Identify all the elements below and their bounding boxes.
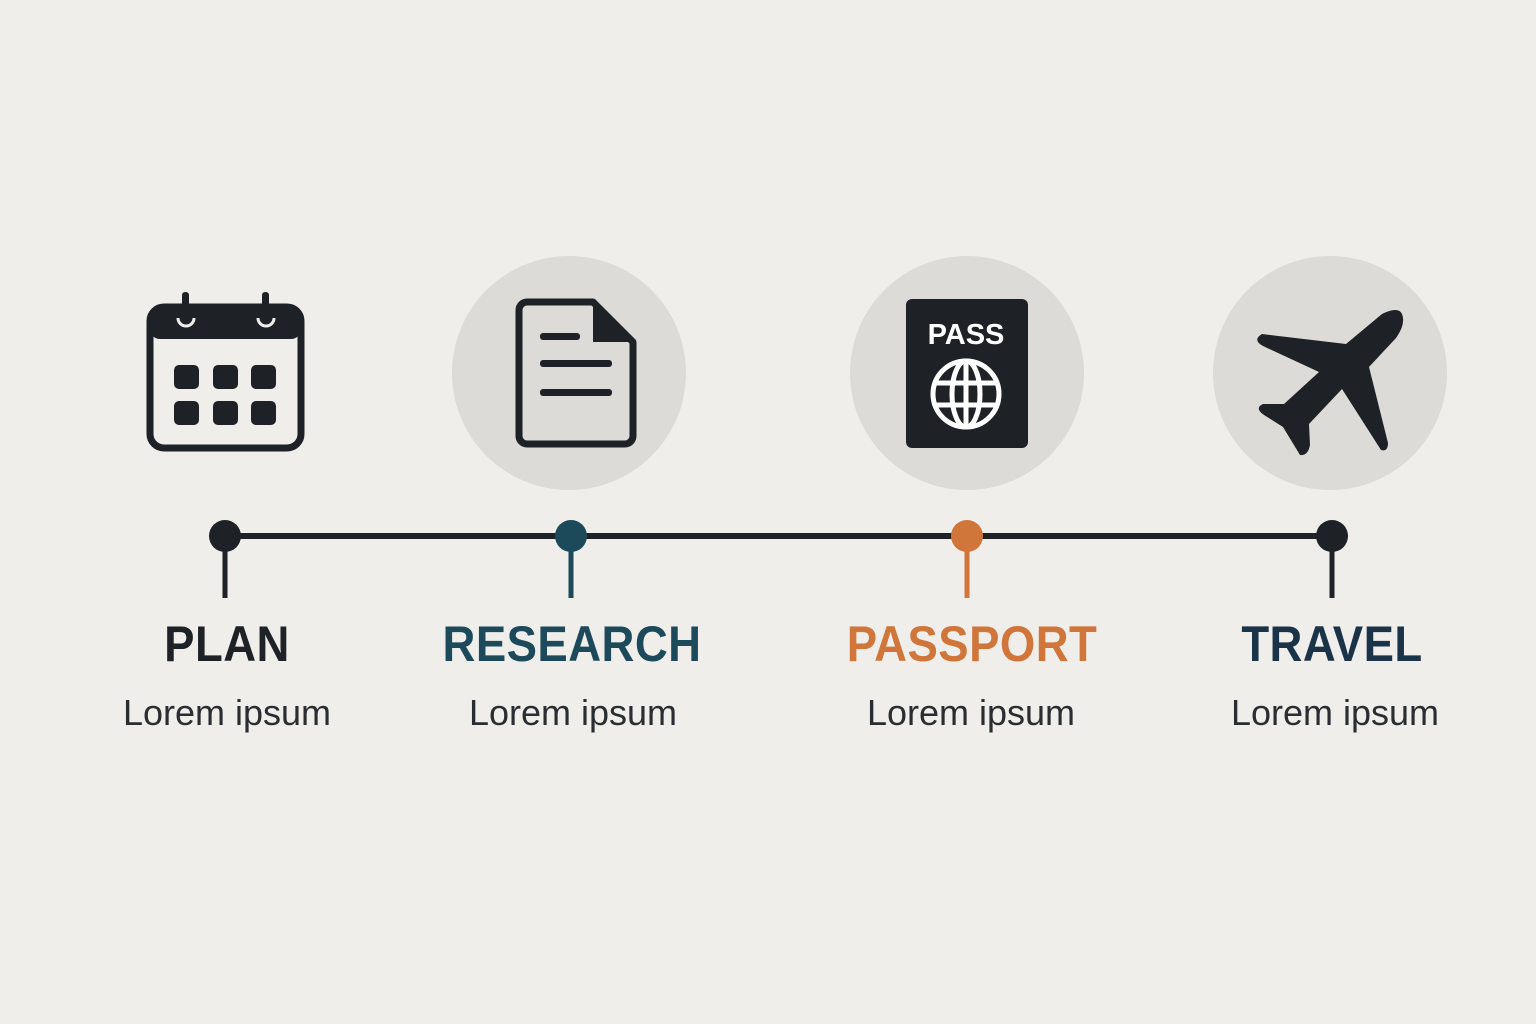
icon: passport: PASS — [928, 319, 1004, 351]
text: research caption: Lorem ipsum — [469, 692, 677, 733]
heading: PASSPORT: PASSPORT — [847, 616, 1097, 672]
heading: RESEARCH: RESEARCH — [443, 616, 701, 672]
icon: airplane — [1213, 256, 1447, 490]
icon: calendar — [150, 292, 301, 448]
text: travel caption: Lorem ipsum — [1231, 692, 1439, 733]
timeline line — [225, 533, 1332, 539]
icon: document — [452, 256, 686, 490]
marker: research — [555, 520, 587, 598]
marker: travel — [1316, 520, 1348, 598]
marker: passport — [951, 520, 983, 598]
text: passport caption: Lorem ipsum — [867, 692, 1075, 733]
marker: plan — [209, 520, 241, 598]
heading: TRAVEL: TRAVEL — [1241, 616, 1423, 672]
icon: passport — [850, 256, 1084, 490]
heading: PLAN: PLAN — [164, 616, 290, 672]
text: plan caption: Lorem ipsum — [123, 692, 331, 733]
